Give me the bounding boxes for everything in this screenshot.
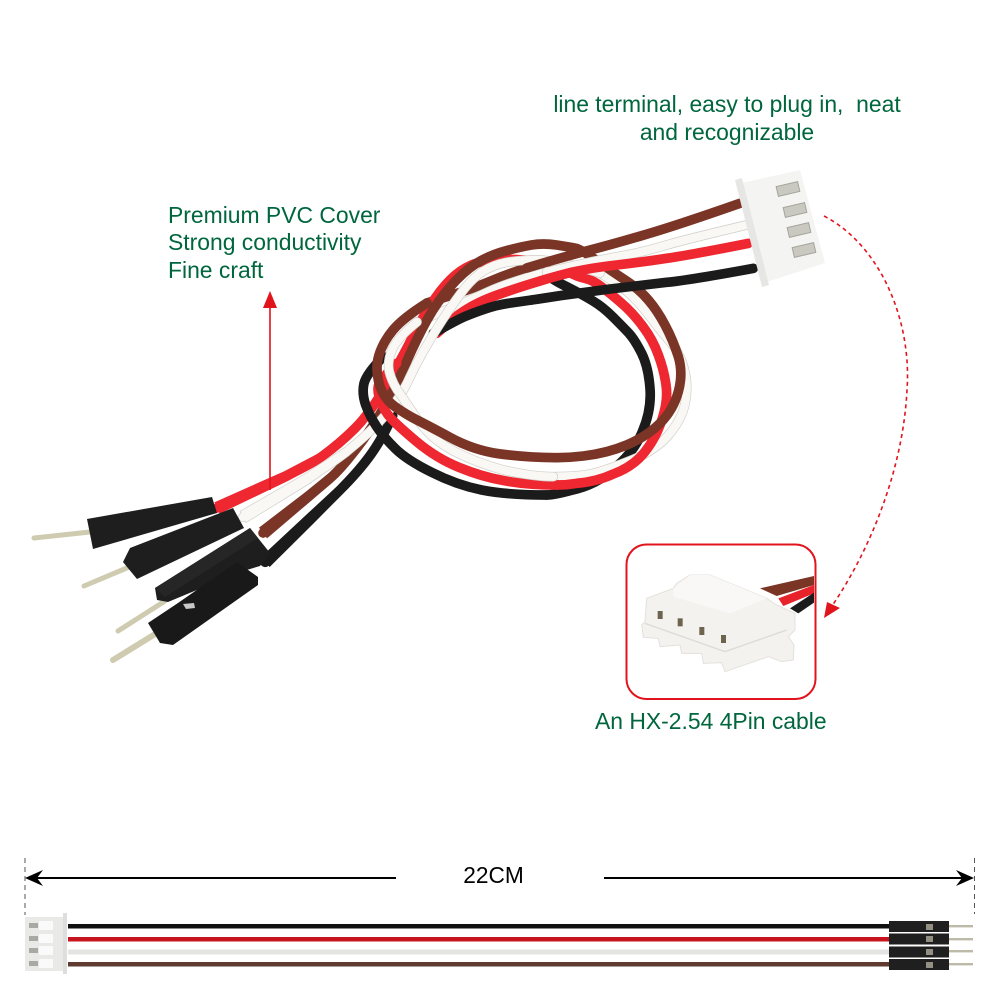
label: premium PVC cover: Fine craft xyxy=(168,257,264,283)
label: premium PVC cover xyxy=(168,202,381,283)
photo: straight cable overview xyxy=(25,913,973,974)
right pins xyxy=(889,921,973,970)
photo: black pin housings and metal pins xyxy=(34,497,270,660)
inset: connector close-up xyxy=(626,544,816,699)
arrow: dashed red curve to inset xyxy=(824,216,908,618)
photo: white 4-pin connector xyxy=(735,170,825,287)
inset frame xyxy=(626,544,816,699)
dimension: 22CM length: 22CM xyxy=(463,862,524,888)
label: line terminal xyxy=(553,91,901,145)
label: line terminal: line terminal, easy to plug in, neat xyxy=(553,91,901,117)
arrow: red pointer to wire xyxy=(263,291,277,490)
left connector xyxy=(25,913,67,974)
photo: looped four-wire cable xyxy=(214,203,753,567)
label: premium PVC cover: Strong conductivity xyxy=(168,229,362,255)
label: premium PVC cover: Premium PVC Cover xyxy=(168,202,381,228)
dimension: 22CM length xyxy=(25,858,974,915)
label: line terminal: and recognizable xyxy=(640,119,814,145)
label: inset caption: An HX-2.54 4Pin cable xyxy=(595,708,827,734)
